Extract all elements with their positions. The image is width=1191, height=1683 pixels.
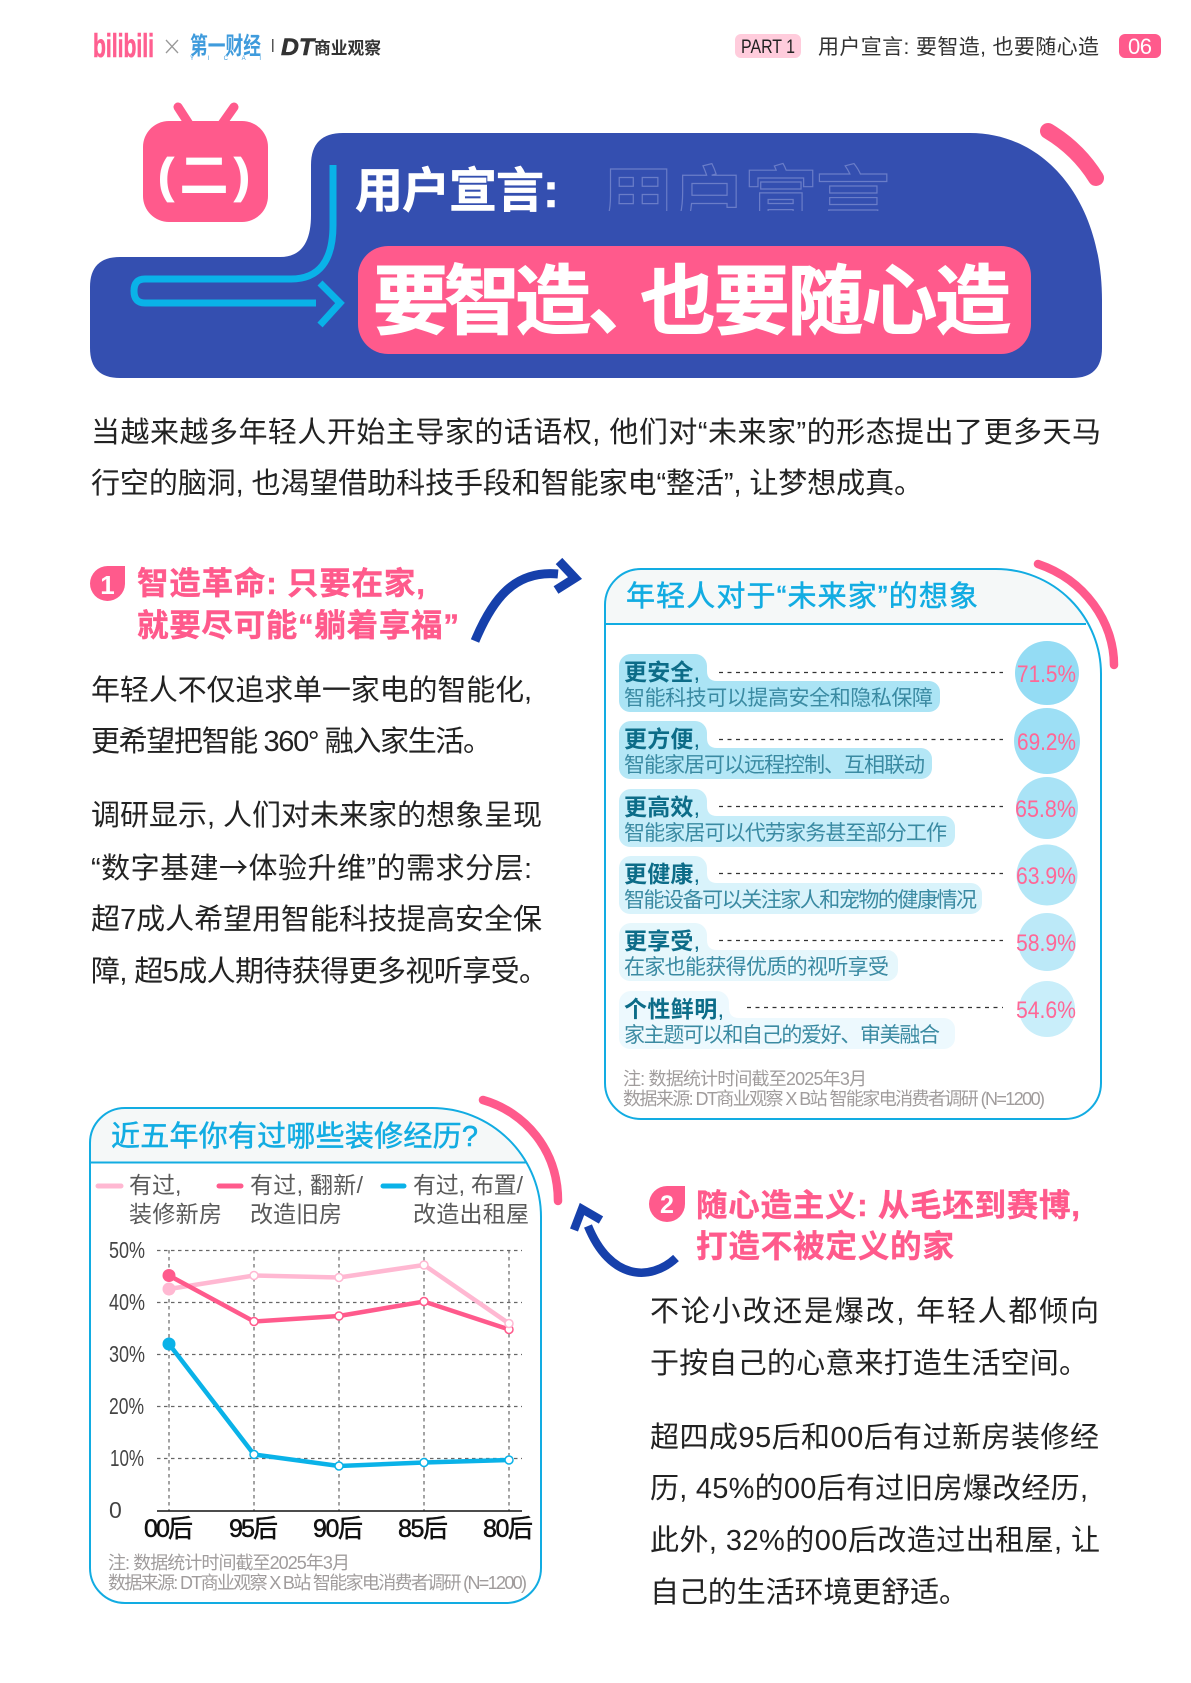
- intro text: 当越来越多年轻人开始主导家的话语权, 他们对“未来家”的形态提出了更多天马: [91, 416, 1101, 449]
- section 1 heading: [137, 565, 459, 643]
- row: safer: 智能科技可以提高安全和隐私保障: [624, 687, 933, 710]
- row: more enjoyment: 在家也能获得优质的视听享受: [624, 956, 889, 979]
- icon: decorative pink arc: [1048, 131, 1096, 178]
- logo: cross: [166, 40, 178, 53]
- section 2 heading: 打造不被定义的家: [696, 1228, 954, 1264]
- note: 注: 数据统计时间截至2025年3月: [623, 1069, 867, 1089]
- panel: renovation line chart: [90, 1100, 558, 1603]
- legend: 有过,: [129, 1172, 181, 1198]
- section 2 body text: 于按自己的心意来打造生活空间。: [650, 1347, 1088, 1380]
- section 1 body text: “数字基建→体验升维”的需求分层:: [91, 845, 532, 887]
- arrow: banner cyan connector: [134, 165, 340, 325]
- arrow: section 2: [574, 1209, 676, 1273]
- legend: 有过, 翻新/: [250, 1172, 364, 1198]
- logo: bilibili: bilibili: [93, 27, 154, 64]
- line: new home renovation: [162, 1261, 509, 1324]
- row: more convenient: 智能家居可以远程控制、互相联动: [624, 754, 925, 777]
- section 1 heading: 就要尽可能“躺着享福”: [137, 607, 459, 643]
- section 1 number icon: [90, 566, 125, 601]
- section 1 body text: 调研显示, 人们对未来家的想象呈现: [91, 799, 542, 832]
- section 2 body text: [650, 1295, 1100, 1609]
- row: healthier: 智能设备可以关注家人和宠物的健康情况: [624, 889, 977, 912]
- note: 注: 数据统计时间截至2025年3月: [108, 1553, 350, 1573]
- logo: yicai: 第一财经: [190, 33, 261, 60]
- section 2 body text: 自己的生活环境更舒适。: [650, 1576, 968, 1609]
- note: 数据来源: DT商业观察 X B站 智能家电消费者调研 (N=1200): [108, 1573, 527, 1593]
- y axis labels: 40%: [109, 1289, 145, 1315]
- row: healthier: 63.9%: [1016, 863, 1076, 890]
- page number: 06: [1128, 34, 1152, 59]
- row: distinctive: [619, 981, 1076, 1049]
- legend: 有过, 布置/: [413, 1172, 524, 1198]
- panel arc: [483, 1100, 558, 1201]
- row: more convenient: 更方便,: [624, 726, 700, 752]
- note: [108, 1553, 527, 1593]
- y axis labels: 50%: [109, 1237, 145, 1263]
- panel arc: [1038, 564, 1114, 665]
- row: healthier: 更健康,: [624, 861, 700, 887]
- row: safer: [619, 641, 1079, 712]
- outlined ghost heading: 用户宣言: [600, 160, 890, 243]
- line: old home renovation: [162, 1269, 513, 1334]
- note: [623, 1069, 1045, 1109]
- row: distinctive: 个性鲜明,: [624, 996, 724, 1022]
- pink title pill: 要智造: [373, 260, 591, 345]
- row: more enjoyment: 更享受,: [624, 928, 700, 954]
- logo: yicai: Y I C A I: [190, 56, 261, 62]
- section 1 number icon: 1: [100, 570, 115, 600]
- row: safer: 更安全,: [624, 659, 700, 685]
- note: 数据来源: DT商业观察 X B站 智能家电消费者调研 (N=1200): [623, 1089, 1045, 1109]
- x axis labels: 00后: [144, 1515, 193, 1543]
- section 2 body text: 此外, 32%的00后改造过出租屋, 让: [650, 1524, 1100, 1557]
- x axis labels: 80后: [483, 1515, 533, 1543]
- icon: TV mascot: [143, 107, 268, 222]
- page number: [1119, 34, 1161, 59]
- pink title pill: [358, 246, 1031, 354]
- logo: DT: DT: [281, 34, 316, 61]
- legend: 装修新房: [129, 1201, 222, 1227]
- pink title pill: 、: [588, 260, 664, 345]
- x axis labels: [144, 1515, 533, 1543]
- row: more efficient: 更高效,: [624, 794, 700, 820]
- section 2 heading: [696, 1187, 1080, 1264]
- icon: TV mascot: (二): [158, 150, 250, 203]
- x axis labels: 85后: [398, 1515, 448, 1543]
- section 2 number icon: [649, 1186, 685, 1222]
- logo: DT: 商业观察: [314, 38, 381, 58]
- section 2 number icon: 2: [660, 1191, 674, 1219]
- row: more convenient: [619, 708, 1080, 779]
- legend: [98, 1172, 529, 1227]
- row: healthier: [619, 844, 1078, 914]
- row: more efficient: [619, 777, 1078, 847]
- legend: 改造旧房: [250, 1201, 342, 1227]
- row: more enjoyment: 58.9%: [1016, 930, 1076, 957]
- y axis labels: [109, 1237, 145, 1523]
- section 2 body text: 不论小改还是爆改, 年轻人都倾向: [650, 1295, 1099, 1328]
- panel: future home: [605, 564, 1114, 1119]
- row: more efficient: 智能家居可以代劳家务甚至部分工作: [624, 822, 947, 845]
- row: distinctive: 家主题可以和自己的爱好、审美融合: [624, 1024, 940, 1047]
- part tag: PART 1: [741, 37, 795, 58]
- section 1 body text: 更希望把智能 360° 融入家生活。: [91, 725, 492, 758]
- panel heading: 近五年你有过哪些装修经历?: [111, 1120, 478, 1153]
- x axis labels: 90后: [313, 1515, 363, 1543]
- section 1 heading: 智造革命: 只要在家,: [137, 565, 425, 601]
- y axis labels: 0: [109, 1497, 122, 1523]
- pink title pill: 也要随心造: [640, 260, 1011, 345]
- section 1 body text: [91, 674, 548, 988]
- chart grid and axes: [157, 1250, 522, 1511]
- logo: DT: [272, 34, 381, 61]
- row: distinctive: 54.6%: [1016, 997, 1076, 1024]
- section 1 body text: 年轻人不仅追求单一家电的智能化,: [91, 674, 532, 707]
- panel heading: 年轻人对于“未来家”的想象: [626, 580, 978, 613]
- arrow: section 1: [475, 561, 575, 641]
- legend: 改造出租屋: [413, 1201, 529, 1227]
- row: more convenient: 69.2%: [1017, 729, 1076, 756]
- y axis labels: 20%: [109, 1393, 144, 1419]
- header section text: 用户宣言: 要智造, 也要随心造: [818, 36, 1099, 59]
- section 1 body text: 障, 超5成人期待获得更多视听享受。: [91, 955, 548, 988]
- section 2 body text: 历, 45%的00后有过旧房爆改经历,: [650, 1472, 1088, 1505]
- x axis labels: 95后: [229, 1515, 278, 1543]
- section 2 body text: 超四成95后和00后有过新房装修经: [650, 1421, 1099, 1454]
- y axis labels: 10%: [110, 1445, 144, 1471]
- y axis labels: 30%: [109, 1341, 145, 1367]
- row: more enjoyment: [619, 913, 1076, 981]
- intro text: [91, 416, 1101, 500]
- row: more efficient: 65.8%: [1015, 796, 1076, 823]
- heading: user declaration: 用户宣言:: [355, 165, 559, 218]
- intro text: 行空的脑洞, 也渴望借助科技手段和智能家电“整活”, 让梦想成真。: [91, 467, 923, 500]
- row: safer: 71.5%: [1017, 661, 1076, 688]
- section 1 body text: 超7成人希望用智能科技提高安全保: [91, 903, 542, 936]
- line: rental renovation: [162, 1338, 513, 1470]
- title banner: [90, 131, 1102, 378]
- section 2 heading: 随心造主义: 从毛坯到赛博,: [696, 1187, 1080, 1223]
